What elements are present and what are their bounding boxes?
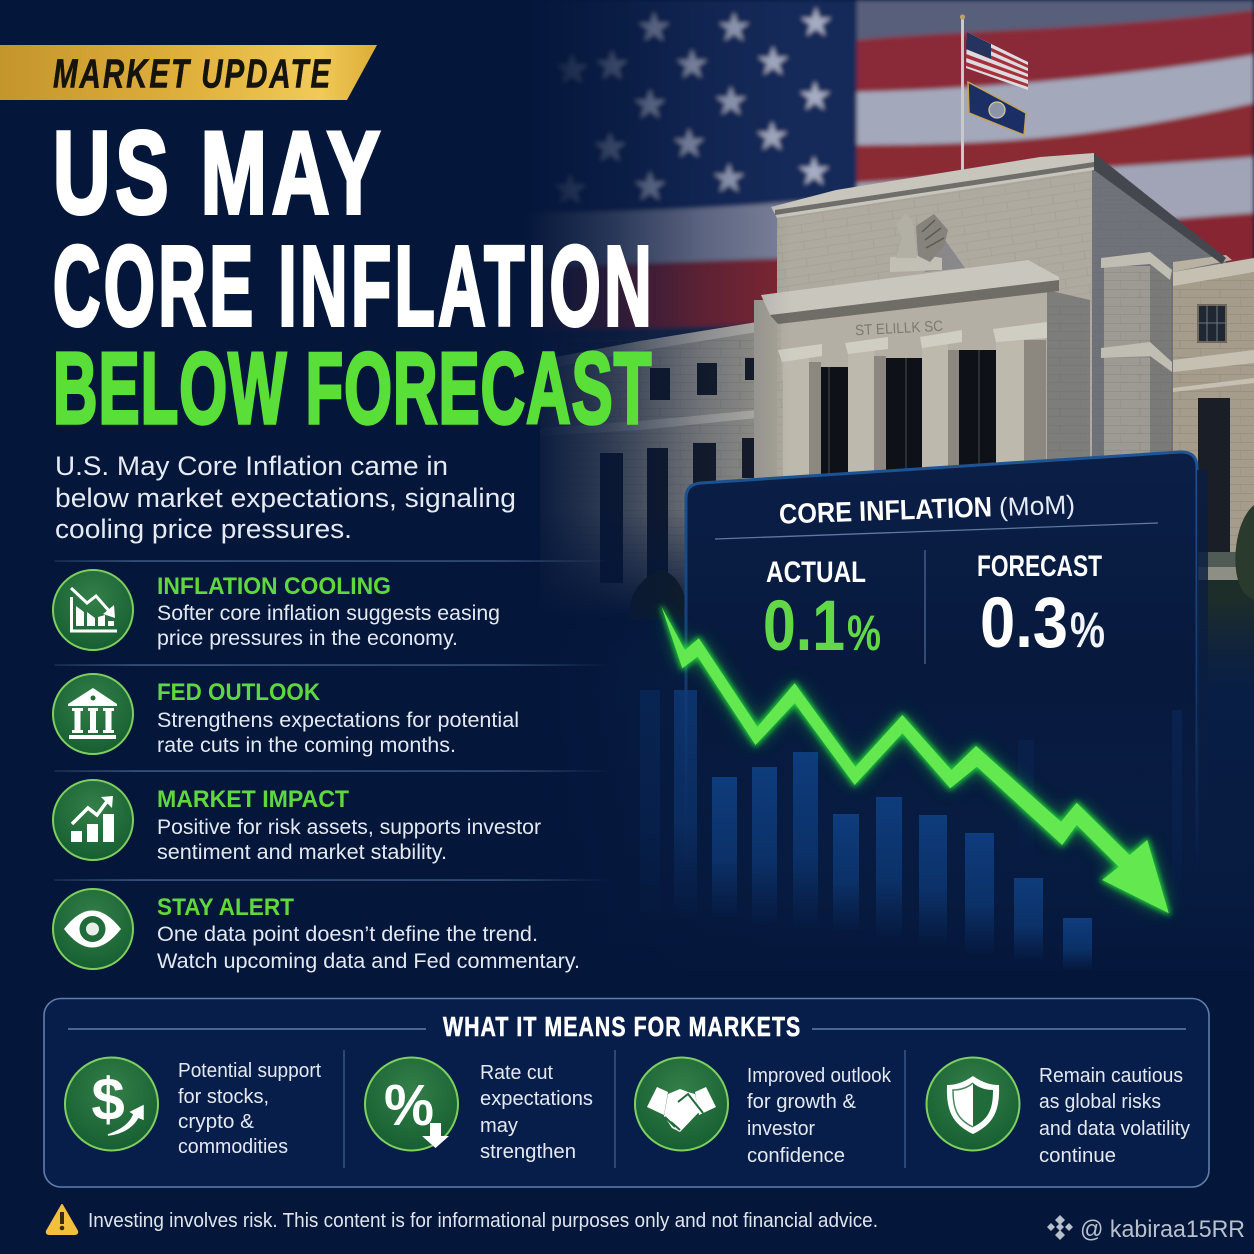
section heading: WHAT IT MEANS FOR MARKETS	[443, 1011, 800, 1043]
title: BELOW FORECAST	[53, 331, 651, 445]
text: for growth &	[747, 1091, 857, 1113]
text	[480, 1062, 593, 1163]
forecast value: 0.3	[980, 584, 1068, 663]
banner: market update: MARKET UPDATE	[53, 51, 331, 97]
description	[157, 708, 519, 757]
market point: growth	[635, 1058, 892, 1167]
text: Improved outlook	[747, 1065, 892, 1087]
text: for stocks,	[178, 1086, 269, 1108]
intro text: cooling price pressures.	[55, 514, 352, 544]
text: investor	[747, 1118, 815, 1140]
disclaimer: Investing involves risk. This content is for informational purposes only and not financial advice.	[88, 1210, 878, 1232]
title: US MAY	[53, 108, 380, 239]
market point: stocks	[65, 1058, 321, 1158]
forecast value: FORECAST	[977, 550, 1102, 583]
item: stay alert	[53, 889, 580, 973]
icon: eye	[53, 889, 133, 969]
text: expectations	[480, 1088, 593, 1110]
panel: what it means for markets	[44, 998, 1209, 1187]
description: Positive for risk assets, supports investor	[157, 815, 541, 839]
market point: rate cuts	[365, 1058, 593, 1163]
text: may	[480, 1115, 518, 1137]
background photo: federal reserve building	[540, 153, 1254, 647]
panel heading: CORE INFLATION	[779, 491, 992, 530]
eagle sculpture	[890, 213, 965, 272]
left wing	[540, 300, 790, 640]
lower background fades	[400, 0, 1254, 1000]
description: price pressures in the economy.	[157, 626, 458, 650]
forecast value	[977, 550, 1105, 663]
icon: dollar with rising arrow: $	[91, 1066, 125, 1133]
icon: rising chart	[53, 780, 133, 860]
description	[157, 815, 541, 864]
item: inflation cooling	[53, 570, 500, 650]
icon: dollar with rising arrow	[65, 1058, 158, 1150]
market point: caution	[926, 1058, 1190, 1167]
description: sentiment and market stability.	[157, 840, 447, 864]
description: Watch upcoming data and Fed commentary.	[157, 949, 580, 973]
actual value: ACTUAL	[766, 556, 866, 589]
heading: MARKET IMPACT	[157, 786, 349, 813]
description: rate cuts in the coming months.	[157, 733, 456, 757]
icon: falling chart	[53, 570, 133, 650]
heading: STAY ALERT	[157, 894, 294, 921]
description: One data point doesn’t define the trend.	[157, 922, 538, 946]
description	[157, 601, 500, 650]
icon: percent with down arrow	[365, 1058, 458, 1150]
building inscription: ST ELILLK SC	[855, 318, 944, 339]
icon: shield	[926, 1058, 1020, 1150]
item: market impact	[53, 780, 541, 864]
intro text	[55, 451, 516, 544]
banner: market update	[0, 45, 377, 100]
icon: handshake	[635, 1058, 728, 1150]
heading: FED OUTLOOK	[157, 679, 321, 706]
heading: INFLATION COOLING	[157, 573, 391, 600]
text: as global risks	[1039, 1091, 1161, 1113]
text: confidence	[747, 1145, 845, 1167]
panel heading: (MoM)	[998, 489, 1075, 522]
text	[178, 1060, 321, 1158]
text: Rate cut	[480, 1062, 553, 1084]
background photo: flagpole with flags	[960, 14, 1028, 170]
actual value: %	[847, 605, 881, 661]
title	[53, 108, 652, 445]
text: commodities	[178, 1136, 288, 1158]
watermark: @ kabiraa15RR	[1080, 1216, 1245, 1243]
background photo: lawn and trees	[540, 505, 1254, 690]
background photo: american flag	[430, 0, 1254, 420]
arrow: falling green trend line	[662, 607, 1169, 913]
intro text: below market expectations, signaling	[55, 483, 516, 513]
panel: core inflation stats	[686, 452, 1208, 875]
text: continue	[1039, 1145, 1116, 1167]
text	[1039, 1065, 1190, 1167]
text: Remain cautious	[1039, 1065, 1183, 1087]
intro text: U.S. May Core Inflation came in	[55, 451, 448, 481]
forecast value: %	[1070, 602, 1105, 658]
bar chart	[640, 690, 1182, 970]
actual value: 0.1	[763, 587, 845, 666]
side and right wing	[1090, 167, 1226, 640]
actual value	[763, 556, 881, 666]
text: strengthen	[480, 1141, 576, 1163]
description: Softer core inflation suggests easing	[157, 601, 500, 625]
icon: bank building	[53, 674, 133, 754]
text	[747, 1065, 892, 1167]
text: and data volatility	[1039, 1118, 1190, 1140]
icon: percent with down arrow: %	[384, 1073, 434, 1138]
item: fed outlook	[53, 674, 519, 757]
text: Potential support	[178, 1060, 321, 1082]
row dividers	[55, 561, 610, 880]
icon: warning triangle	[47, 1205, 77, 1234]
description	[157, 922, 580, 973]
main block	[777, 170, 1092, 640]
text: crypto &	[178, 1111, 255, 1133]
title: CORE INFLATION	[53, 222, 652, 349]
description: Strengthens expectations for potential	[157, 708, 519, 732]
